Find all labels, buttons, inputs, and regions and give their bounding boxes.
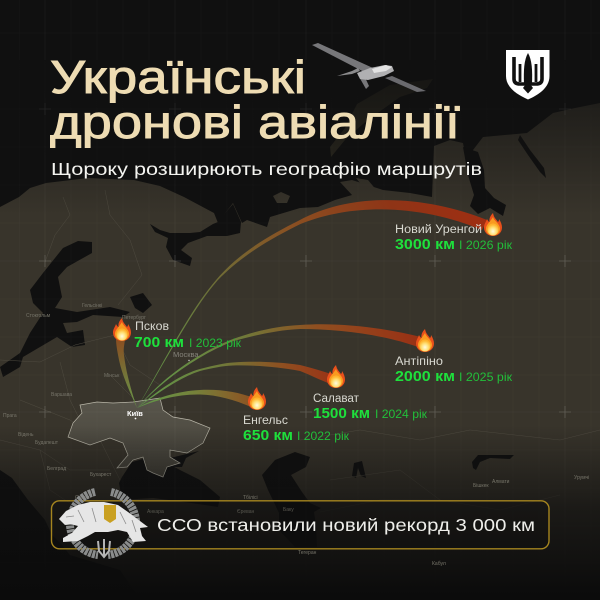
label: Engels: 650 км: [243, 428, 293, 444]
label: Pskov: 700 км: [134, 335, 184, 351]
Kyiv label: Київ: [127, 409, 143, 418]
caspian sea: [262, 452, 321, 547]
minor city labels: Стокгольм: [26, 313, 51, 319]
arrow: route to Engels: [137, 390, 254, 408]
title: дронові авіалінії: [50, 96, 460, 148]
minor city labels: Петербург: [122, 315, 146, 321]
minor city labels: Урумчі: [574, 475, 589, 481]
callout: record banner: [52, 501, 549, 549]
wolf shading: [66, 508, 136, 532]
icon: drone: [312, 43, 426, 92]
arrow: route to Novy Urengoy: [137, 200, 487, 408]
label: Pskov: [134, 321, 242, 351]
ob gulf: [463, 147, 506, 216]
icon: special operations forces wolf emblem: [59, 492, 148, 557]
label: Novy Urengoy: І 2026 рік: [459, 240, 513, 252]
baltic sea: [0, 241, 130, 377]
label: Salavat: Салават: [313, 393, 360, 405]
novaya zemlya: [330, 79, 433, 157]
callout text: ССО встановили новий рекорд 3 000 км: [157, 515, 535, 535]
subtitle: Щороку розширюють географію маршрутів: [51, 159, 482, 179]
icon: ukrainian armed forces shield: [506, 50, 550, 100]
label: Salavat: 1500 км: [313, 406, 370, 422]
icon: flame Antipino: [416, 329, 434, 352]
minor city labels: Відень: [18, 432, 34, 438]
gold trident bar: [104, 505, 116, 523]
wreath: [70, 492, 136, 555]
icon: flame Salavat: [327, 365, 345, 388]
top fade: [0, 60, 600, 215]
aral sea: [352, 461, 366, 478]
mediterranean: [0, 470, 140, 600]
label: Engels: Енгельс: [243, 415, 288, 427]
wolf: [59, 502, 148, 542]
title: Українські: [50, 51, 306, 103]
sea of azov: [168, 451, 199, 467]
label: Antipino: [395, 356, 513, 385]
minor city labels: Софія: [75, 495, 90, 501]
label: Pskov: І 2023 рік: [189, 338, 242, 350]
title: [50, 51, 460, 148]
arrow: route to Pskov: [116, 338, 137, 408]
minor city labels: Тбілісі: [243, 495, 258, 501]
minor city labels: Бухарест: [90, 472, 112, 478]
minor city labels: Тегеран: [298, 550, 317, 556]
label: Pskov: Псков: [135, 321, 169, 333]
icon: flame Novy Urengoy: [484, 213, 502, 236]
country borders: [0, 190, 600, 512]
label: Salavat: І 2024 рік: [375, 409, 428, 421]
minor city labels: Варшава: [51, 392, 72, 398]
minor city labels: Белград: [47, 466, 66, 472]
minor city labels: Алмати: [492, 479, 510, 485]
white sea: [150, 204, 241, 266]
minor city labels: Прага: [3, 413, 17, 419]
arrow: route to Antipino: [137, 324, 421, 408]
bottom edge: [0, 595, 600, 600]
label: Novy Urengoy: 3000 км: [395, 237, 455, 253]
label: Antipino: І 2025 рік: [459, 372, 513, 384]
minor city labels: Бішкек: [473, 483, 489, 489]
label: Antipino: Антіпіно: [395, 356, 443, 368]
minor city labels: Гельсінкі: [82, 303, 102, 309]
gulf of yenisei: [518, 135, 546, 178]
label: Engels: [243, 415, 350, 444]
label: Salavat: [313, 393, 428, 422]
label: Novy Urengoy: [395, 224, 513, 253]
icon: flame Engels: [248, 387, 266, 410]
icon: flame Pskov: [113, 318, 131, 341]
label: Engels: І 2022 рік: [297, 431, 350, 443]
minor city labels: Анкара: [147, 509, 164, 515]
kolguev island: [273, 192, 290, 203]
ukraine: [68, 398, 210, 477]
minor city labels: Кабул: [432, 561, 446, 567]
minor city labels: Єреван: [237, 509, 255, 515]
Moscow label: Москва: [173, 350, 199, 359]
bottom fade: [0, 425, 600, 595]
label: Antipino: 2000 км: [395, 369, 455, 385]
lake balkhash: [472, 455, 514, 470]
small trident: [98, 539, 110, 557]
minor city labels: [3, 303, 589, 567]
minor city labels: Мінськ: [104, 373, 120, 379]
label: Novy Urengoy: Новий Уренгой: [395, 224, 482, 236]
minor city labels: Будапешт: [35, 440, 59, 446]
black sea: [119, 458, 220, 507]
minor city labels: Баку: [283, 507, 294, 513]
lake ladoga: [130, 293, 152, 313]
flight routes: [116, 200, 487, 408]
arrow: route to Salavat: [137, 362, 331, 408]
vaygach: [356, 178, 378, 192]
